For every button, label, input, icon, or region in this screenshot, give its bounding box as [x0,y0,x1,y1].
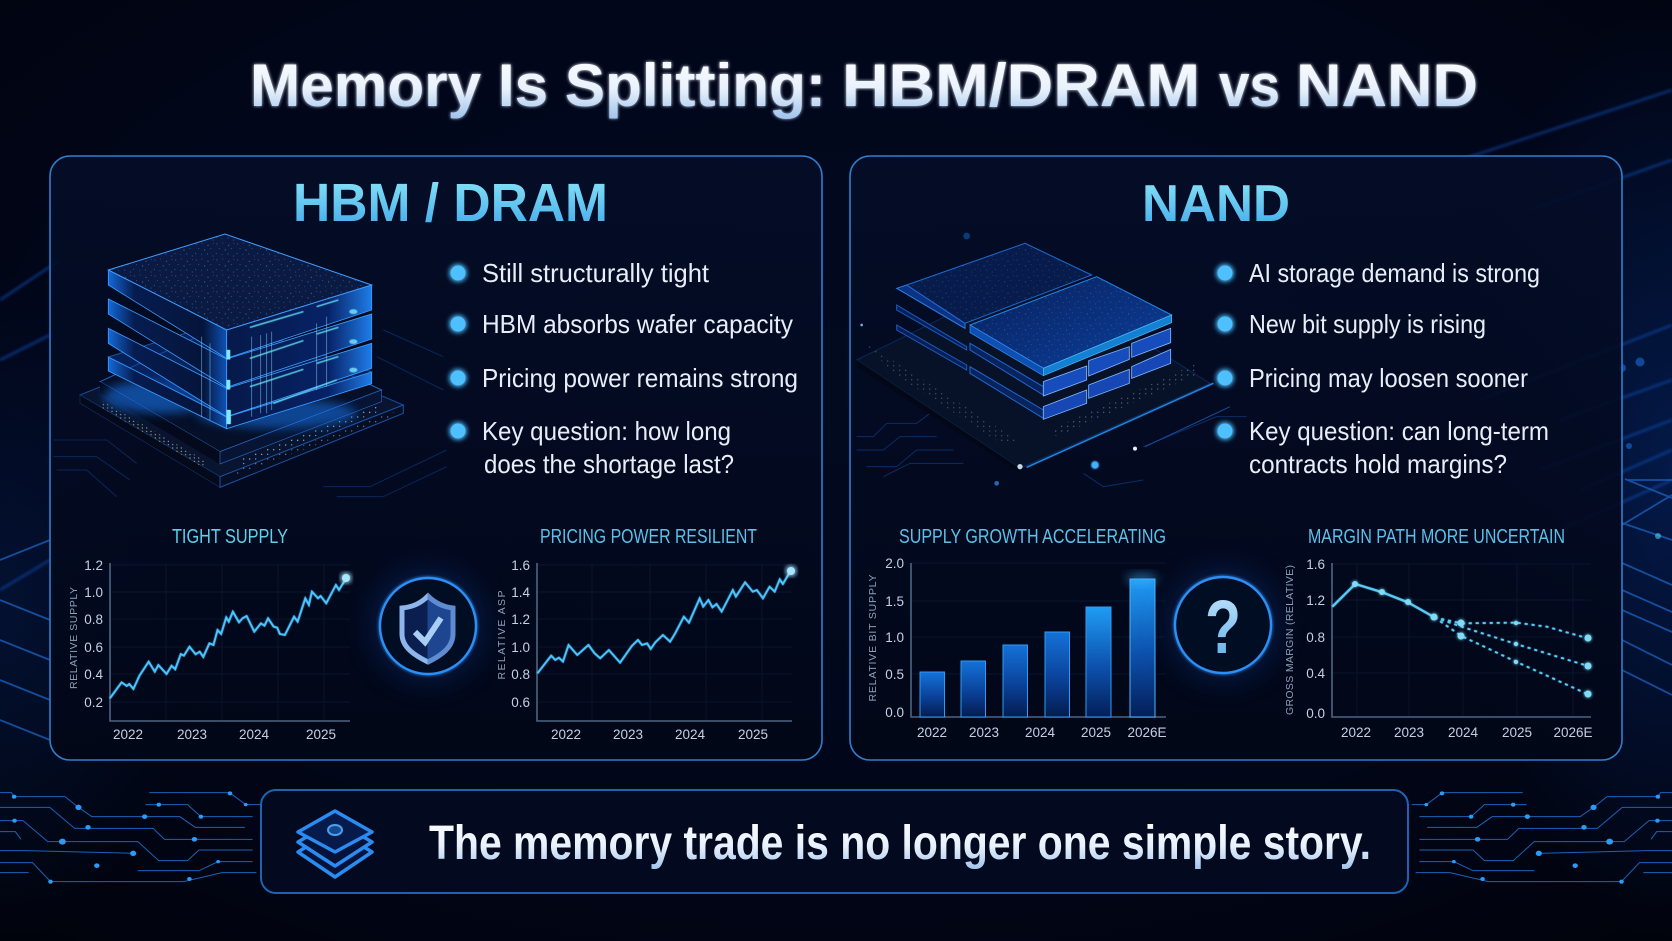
heading: NAND: NAND [1142,175,1290,233]
chart: supply growth accelerating: 2025 [1081,725,1111,740]
chart: pricing power resilient: 1.2 [511,612,530,627]
bullets: NAND [1218,258,1549,479]
chart: margin path more uncertain: 2026E [1553,725,1593,740]
chart: tight supply: 0.8 [84,612,103,627]
chart: pricing power resilient: 0.8 [511,667,530,682]
chart: margin path more uncertain: 2025 [1502,725,1532,740]
chart: pricing power resilient: 2025 [738,727,768,742]
chart: margin path more uncertain: 1.2 [1306,593,1325,608]
icon: question mark badge [1165,567,1281,683]
chart: margin path more uncertain: 0.4 [1306,666,1325,681]
chart title: MARGIN PATH MORE UNCERTAIN [1308,526,1565,548]
bars [920,579,1155,717]
chart: tight supply: 0.6 [84,640,103,655]
illustration: stacked HBM chip [53,234,447,497]
icon: question mark badge: ? [1205,585,1241,670]
chart title: PRICING POWER RESILIENT [540,526,757,548]
chart: pricing power resilient [496,526,795,742]
bullet 4: does the shortage last? [484,449,734,479]
chart: supply growth accelerating: 1.0 [885,630,904,645]
chart: margin path more uncertain: 2024 [1448,725,1479,740]
chart: supply growth accelerating: 2024 [1025,725,1056,740]
callout text: The memory trade is no longer one simple story. [429,817,1371,870]
layer 4 [108,321,372,429]
chart: pricing power resilient: RELATIVE ASP [496,590,508,680]
chart: tight supply [68,526,350,742]
chart: pricing power resilient: 1.0 [511,640,530,655]
bullet 4: contracts hold margins? [1249,449,1507,479]
chart: tight supply: 1.2 [84,558,103,573]
chart: supply growth accelerating: 0.5 [885,667,904,682]
bullet 2: New bit supply is rising [1249,309,1486,339]
chart: tight supply: 0.4 [84,667,103,682]
chart: supply growth accelerating: 2026E [1127,725,1167,740]
chart: pricing power resilient: 2023 [613,727,643,742]
chart: tight supply: 2023 [177,727,207,742]
illustration: NAND chip [857,233,1247,487]
chart: margin path more uncertain [1284,526,1593,740]
callout banner [261,790,1408,893]
bullet 4 [1218,416,1549,479]
chart: margin path more uncertain: 2023 [1394,725,1424,740]
title: HBM/DRAM [842,52,1200,119]
chart: supply growth accelerating: 2.0 [885,556,904,571]
bullet 4: Key question: how long [482,416,731,446]
rear layers [897,325,967,370]
chart: tight supply: 1.0 [84,585,103,600]
bullet 2: HBM absorbs wafer capacity [482,309,793,339]
icon: shield badge [370,568,486,684]
chart: supply growth accelerating: RELATIVE BIT SUPPLY [867,574,879,702]
chart: pricing power resilient: 1.4 [511,585,530,600]
chart: margin path more uncertain: GROSS MARGIN (RELATIVE) [1284,565,1296,715]
chart: supply growth accelerating: 2023 [969,725,999,740]
chart: pricing power resilient: 2024 [675,727,706,742]
icon: stacked layers [298,811,372,877]
chart title: SUPPLY GROWTH ACCELERATING [899,526,1166,548]
chart: supply growth accelerating: 0.0 [885,705,904,720]
chart: margin path more uncertain: 0.0 [1306,706,1325,721]
chart: tight supply: 2025 [306,727,336,742]
chart: tight supply: 2022 [113,727,143,742]
bullet 3: Pricing may loosen sooner [1249,363,1528,393]
front blocks row 2 [1043,328,1171,396]
top tiles [907,243,1092,323]
title [250,52,1478,119]
chart: pricing power resilient: 1.6 [511,558,530,573]
chart title: TIGHT SUPPLY [172,526,288,548]
bullet 4 [450,416,734,479]
layer 3 [108,328,372,417]
bullets: HBM [450,258,798,479]
chart: pricing power resilient: 0.6 [511,695,530,710]
chart: margin path more uncertain: 2022 [1341,725,1371,740]
chart: supply growth accelerating [867,526,1167,740]
layer 2 [108,299,372,387]
bullet 3: Pricing power remains strong [482,363,798,393]
chart: supply growth accelerating: 2022 [917,725,947,740]
title: Memory Is Splitting: [250,52,826,119]
margin lines [1332,584,1588,694]
title: vs [1219,52,1280,119]
chart: tight supply: RELATIVE SUPPLY [68,587,80,689]
panel: NAND [850,156,1622,760]
panel: HBM / DRAM [50,156,822,760]
bullet 4: Key question: can long-term [1249,416,1549,446]
layer 1 [108,270,227,358]
title: NAND [1296,52,1478,119]
chart: margin path more uncertain: 0.8 [1306,630,1325,645]
heading: HBM / DRAM: HBM / DRAM [293,173,608,233]
chart: margin path more uncertain: 1.6 [1306,557,1325,572]
bullet 1: AI storage demand is strong [1249,258,1540,288]
chart: supply growth accelerating: 1.5 [885,594,904,609]
chart: pricing power resilient: 2022 [551,727,581,742]
chart: tight supply: 0.2 [84,695,103,710]
bullet 1: Still structurally tight [482,258,710,288]
chart: tight supply: 2024 [239,727,270,742]
front blocks row 3 [1043,349,1171,419]
